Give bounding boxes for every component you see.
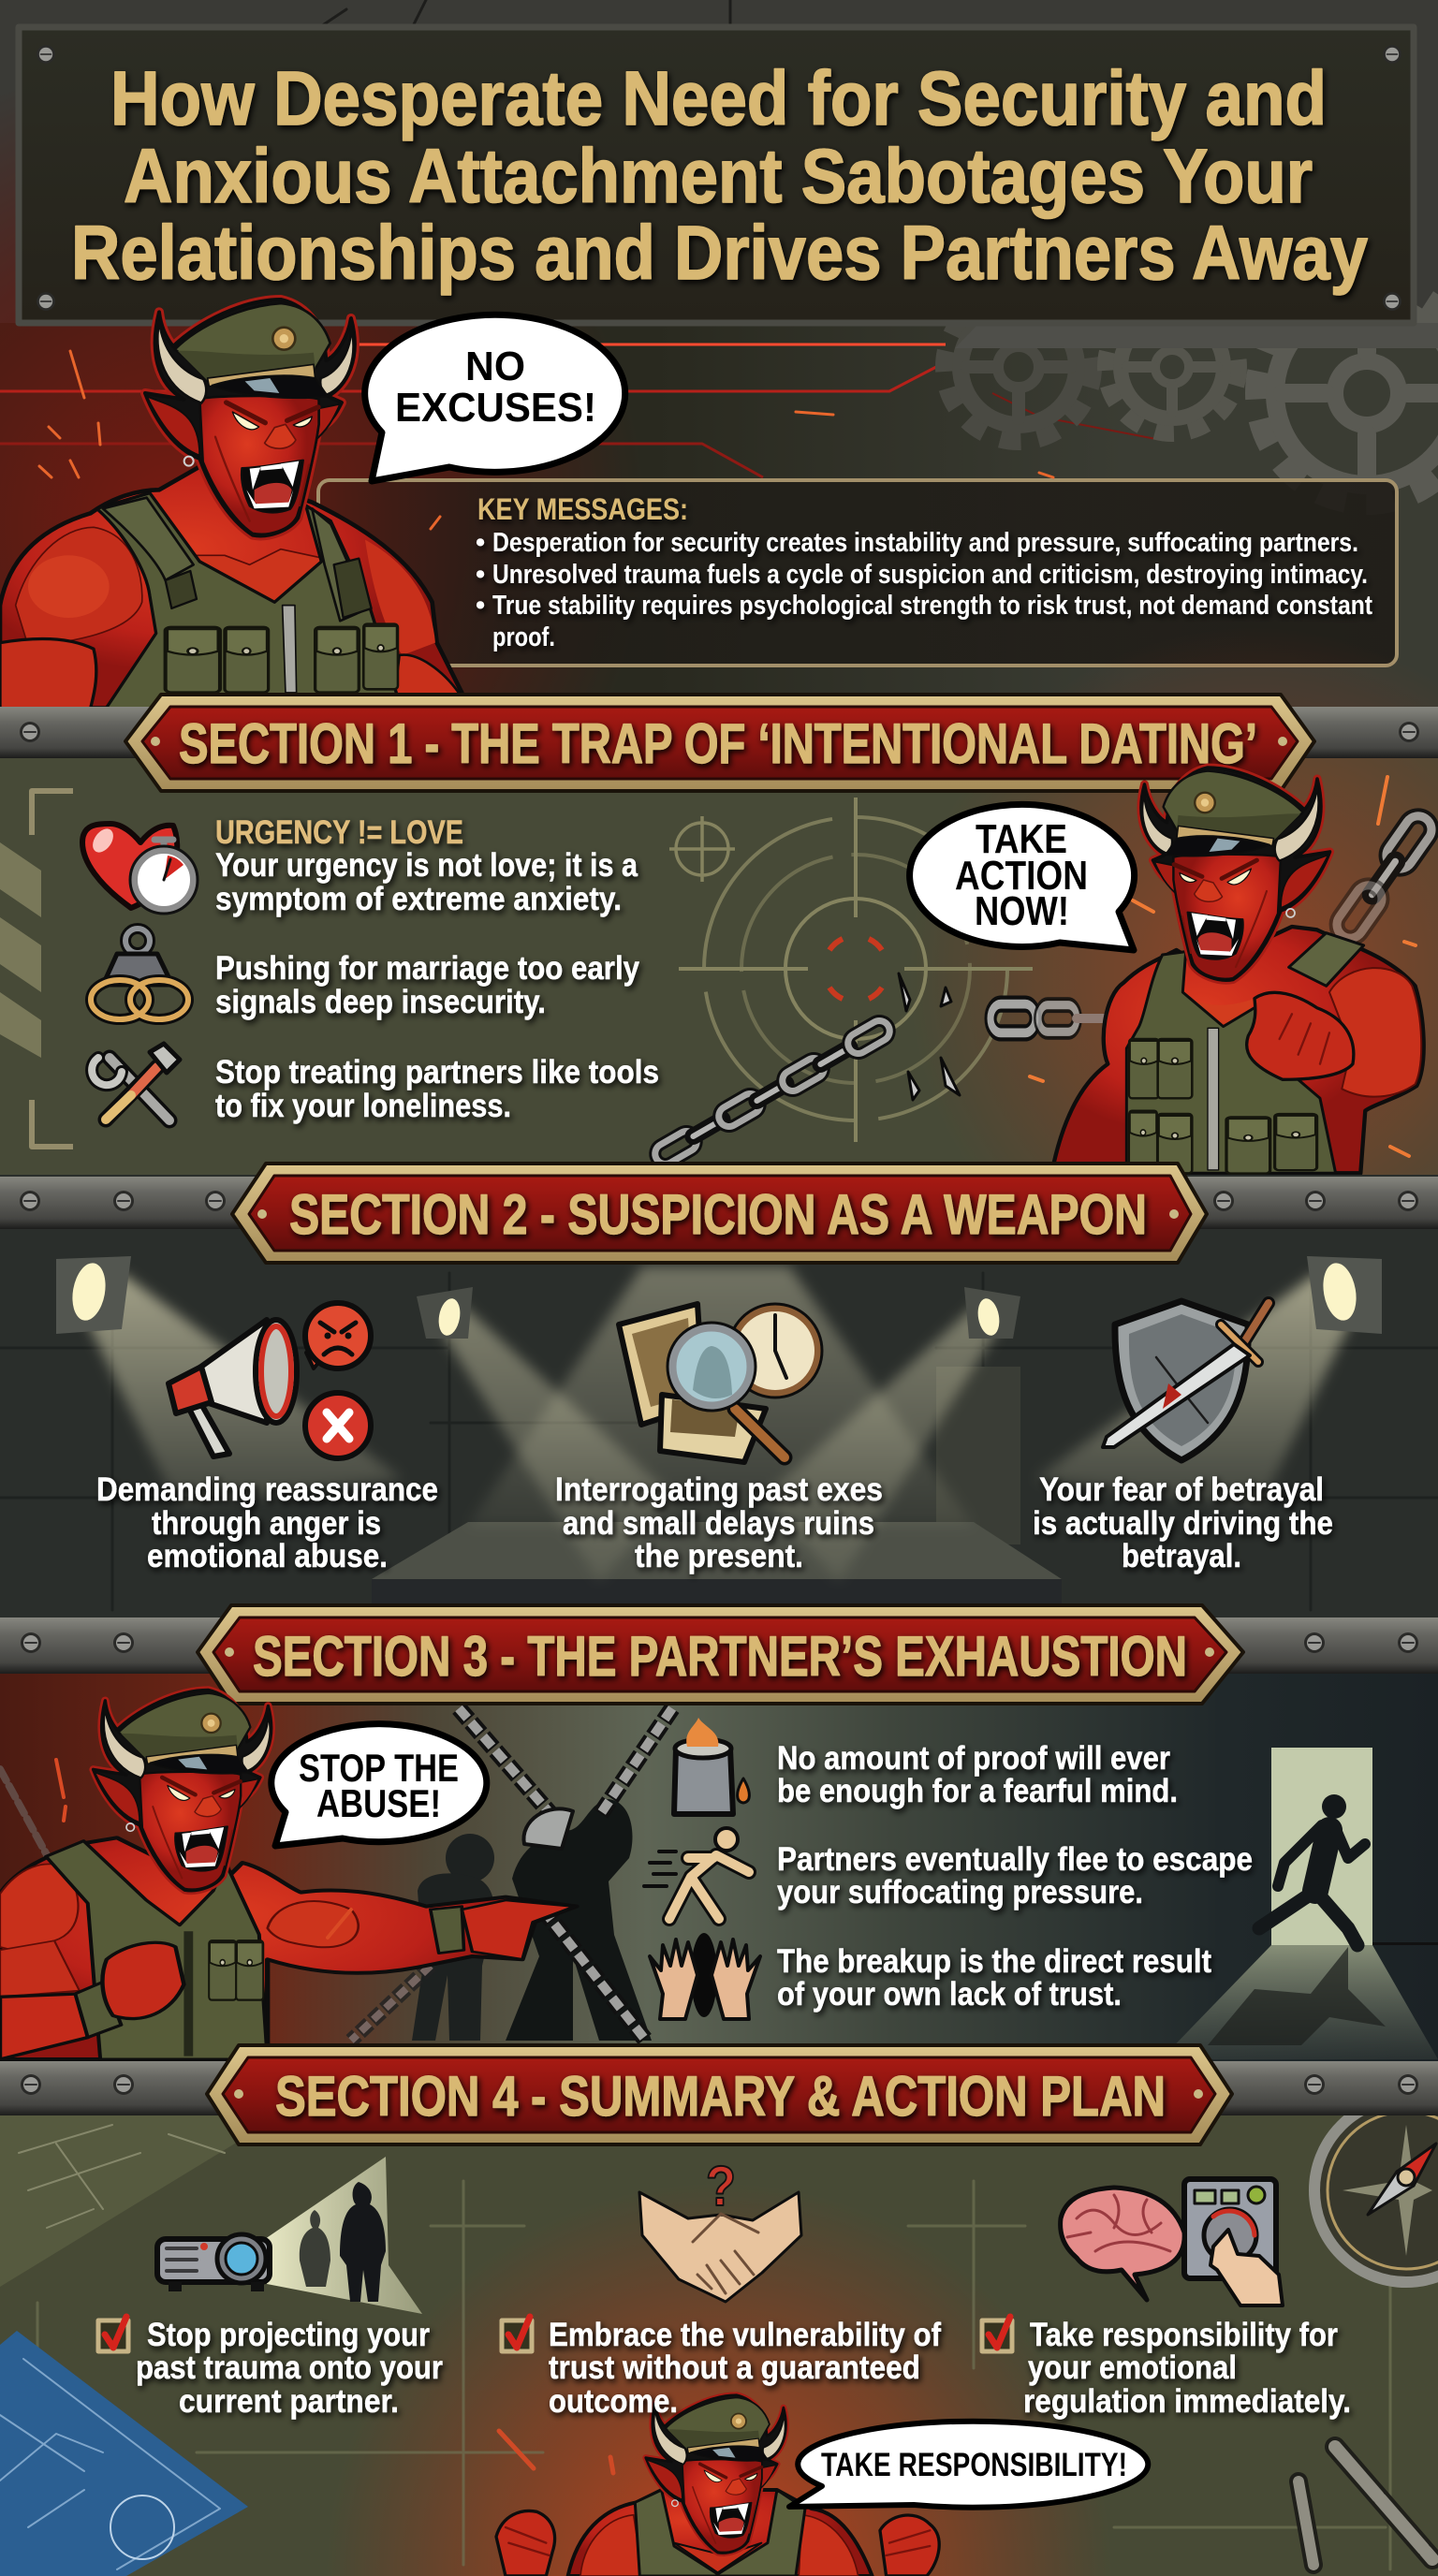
urgency heading: URGENCY != LOVE <box>215 814 463 851</box>
section 2 text <box>96 1471 1333 1574</box>
icon: weight and rings <box>91 929 188 1019</box>
section 3 bar <box>0 1617 1438 1674</box>
speech bubble: take responsibility <box>789 2422 1148 2508</box>
section 3 banner: SECTION 3 - THE PARTNER’S EXHAUSTION <box>253 1625 1187 1688</box>
speech bubble: stop the abuse: ABUSE! <box>316 1781 441 1825</box>
speech bubble: take responsibility: TAKE RESPONSIBILITY! <box>821 2447 1127 2483</box>
tools body <box>215 1054 659 1124</box>
key messages heading: KEY MESSAGES: <box>477 492 688 526</box>
urgency body: Your urgency is not love; it is a <box>215 847 638 884</box>
speech bubble: take action now: TAKE <box>976 816 1067 862</box>
section 4 banner: SECTION 4 - SUMMARY & ACTION PLAN <box>275 2065 1166 2128</box>
title: Anxious Attachment Sabotages Your <box>124 134 1313 219</box>
column 1 text <box>96 1471 438 1574</box>
flee text: your suffocating pressure. <box>777 1874 1143 1910</box>
icon: leaking bucket <box>674 1718 749 1814</box>
top background <box>0 0 1438 992</box>
section 1 bar <box>0 707 1438 758</box>
panel: key messages <box>318 480 1397 666</box>
metal plate <box>955 323 1438 348</box>
action 1 text: Stop projecting your <box>147 2317 430 2353</box>
column 1 text: emotional abuse. <box>147 1538 388 1574</box>
icon: running figure <box>644 1828 749 1919</box>
column 3 text: betrayal. <box>1122 1538 1241 1574</box>
devil: take responsibility <box>496 2395 939 2576</box>
red circuit lines <box>0 344 1161 477</box>
icon: wrench and hammer <box>92 1044 180 1120</box>
speech bubble: no excuses: NO <box>465 344 525 389</box>
blueprint <box>0 2331 248 2576</box>
icon: cracked shield and sword <box>1103 1301 1269 1460</box>
devil: no excuses <box>0 300 462 709</box>
check 1 <box>98 2317 128 2351</box>
key messages list: • <box>476 560 485 590</box>
tools body: to fix your loneliness. <box>215 1088 511 1124</box>
gears <box>946 283 1438 504</box>
marriage body: Pushing for marriage too early <box>215 950 639 987</box>
action 2 text: outcome. <box>549 2383 678 2420</box>
column 1 text: Demanding reassurance <box>96 1471 438 1508</box>
proof text <box>777 1740 1178 1809</box>
column 2 text: Interrogating past exes <box>555 1471 883 1508</box>
speech bubble: no excuses <box>365 315 625 481</box>
urgency body <box>215 847 638 917</box>
proof text: No amount of proof will ever <box>777 1740 1170 1777</box>
stage front <box>372 1579 1062 1613</box>
column 3 text: Your fear of betrayal <box>1039 1471 1324 1508</box>
sparks <box>39 351 1053 529</box>
devil: stop the abuse <box>0 1690 577 2059</box>
panel: section 3 background <box>0 1624 1438 2083</box>
column 3 text: is actually driving the <box>1033 1505 1333 1542</box>
marriage body <box>215 950 639 1020</box>
column 2 text <box>555 1471 883 1574</box>
key messages list: proof. <box>492 622 555 652</box>
stage <box>372 1522 1062 1579</box>
upper right chain <box>1331 811 1437 944</box>
action 1 text: current partner. <box>179 2383 399 2420</box>
speech bubble: take action now <box>910 804 1135 950</box>
column 3 text <box>1033 1471 1333 1574</box>
section 4 bar <box>0 2061 1438 2115</box>
speech bubble: take action now: NOW! <box>975 888 1069 934</box>
pencils <box>1299 2447 1432 2565</box>
column 2 text: the present. <box>635 1538 803 1574</box>
icon: photos magnifier and clock <box>619 1304 822 1462</box>
action 2 text <box>549 2317 941 2420</box>
column 2 text: and small delays ruins <box>563 1505 874 1542</box>
icon: handshake with question mark: ? <box>706 2155 736 2217</box>
flee text: Partners eventually flee to escape <box>777 1841 1253 1878</box>
speech bubble: take action now: ACTION <box>955 853 1088 899</box>
speech bubble: stop the abuse <box>271 1724 487 1846</box>
compass <box>1314 2099 1438 2282</box>
urgency body: symptom of extreme anxiety. <box>215 881 622 917</box>
key messages list: • <box>476 528 485 558</box>
section 4 banner <box>207 2045 1232 2144</box>
breakup text: of your own lack of trust. <box>777 1976 1122 2012</box>
devil: take action now <box>1051 768 1424 1173</box>
action 2 text: trust without a guaranteed <box>549 2349 920 2386</box>
action 3 text: regulation immediately. <box>1023 2383 1351 2420</box>
broken chain <box>652 973 1114 1168</box>
section 3 text <box>777 1740 1253 2012</box>
breakup text: The breakup is the direct result <box>777 1943 1211 1980</box>
section 1 text <box>215 814 659 1124</box>
section 4 checklist <box>98 2317 1012 2351</box>
column 1 text: through anger is <box>152 1505 381 1542</box>
action 3 text <box>1023 2317 1351 2420</box>
action 3 text: Take responsibility for <box>1030 2317 1338 2353</box>
action 1 text <box>136 2317 443 2420</box>
check 3 <box>982 2317 1012 2351</box>
panel: section 1 background <box>0 627 1438 1320</box>
action 3 text: your emotional <box>1028 2349 1237 2386</box>
key messages list <box>476 528 1372 652</box>
action 2 text: Embrace the vulnerability of <box>549 2317 941 2353</box>
title <box>71 56 1368 296</box>
sparks section 1 <box>1030 777 1416 1170</box>
icon: heart and stopwatch <box>82 824 198 914</box>
icon: parting hands <box>650 1933 760 2019</box>
section 2 banner: SECTION 2 - SUSPICION AS A WEAPON <box>289 1183 1147 1246</box>
check 2 <box>502 2317 532 2351</box>
section 2 banner <box>232 1164 1207 1263</box>
breakup text <box>777 1943 1211 2012</box>
marriage body: signals deep insecurity. <box>215 984 546 1020</box>
icon: projector and silhouettes <box>157 2157 422 2314</box>
target reticle <box>669 798 1033 1142</box>
speech bubble: stop the abuse: STOP THE <box>299 1746 459 1790</box>
key messages list: • <box>476 591 485 621</box>
tools body: Stop treating partners like tools <box>215 1054 659 1090</box>
panel: section 2 background <box>0 1175 1438 1624</box>
flee text <box>777 1841 1253 1910</box>
door and light <box>1161 1748 1438 2059</box>
icon: brain and control panel <box>1061 2179 1283 2305</box>
sparks section 3 <box>56 1760 351 1938</box>
speech bubble: no excuses: EXCUSES! <box>395 385 596 431</box>
proof text: be enough for a fearful mind. <box>777 1773 1178 1809</box>
sparks section 4 <box>499 2431 1067 2481</box>
icon: megaphone with angry face and x <box>169 1303 371 1458</box>
chained silhouettes <box>351 1708 672 2041</box>
section 1 banner <box>125 695 1314 791</box>
panel: section 4 background <box>0 2097 1438 2576</box>
section 3 banner <box>198 1605 1243 1704</box>
icon: handshake with question mark <box>639 2155 801 2302</box>
spotlights <box>56 1256 1382 1582</box>
title panel <box>19 27 1414 323</box>
section 2 bar <box>0 1177 1438 1229</box>
left faded chain <box>0 1769 56 1872</box>
running silhouette <box>1259 1794 1365 1945</box>
action 1 text: past trauma onto your <box>136 2349 443 2386</box>
section 4 text <box>136 2317 1351 2420</box>
